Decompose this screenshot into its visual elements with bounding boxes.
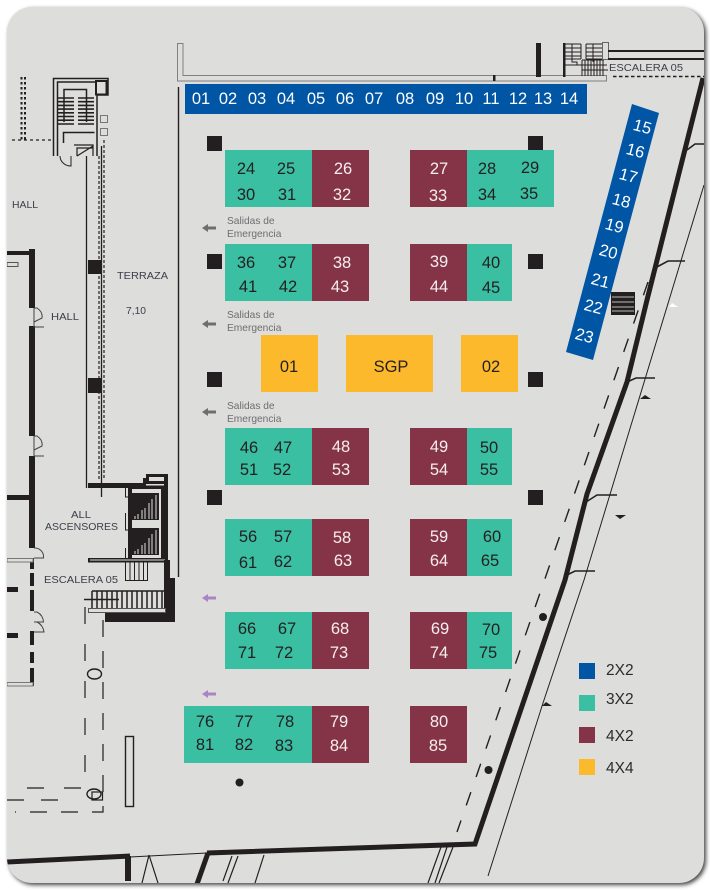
booths row 2 right: 44 (430, 278, 448, 296)
booths row 3 right: 50 (480, 439, 498, 457)
top left stair core (12, 77, 108, 166)
label: hall upper: HALL (12, 200, 38, 211)
diagonal blue booths 15-23: 23 (573, 325, 595, 347)
booths row 6 left: 78 (276, 713, 294, 731)
booths row 3 left: 48 (332, 438, 350, 456)
legend: 3X2 (606, 691, 634, 708)
booths row 4 right: 64 (430, 552, 448, 570)
booths row 1 left: 25 (277, 160, 295, 178)
top blue booths 01-14: 04 (277, 90, 295, 108)
emergency exit 1: Salidas de (227, 216, 275, 227)
booths row 2 left: 42 (279, 278, 297, 296)
booths row 4 right (410, 519, 512, 576)
booths row 5 right: 69 (431, 620, 449, 638)
columns (207, 136, 543, 505)
booths row 4 left: 61 (239, 554, 257, 572)
dots (236, 613, 547, 786)
label: escalera lower: ESCALERA 05 (44, 575, 118, 586)
label: terraza height: 7,10 (126, 306, 146, 317)
emergency exit 1 (202, 216, 282, 240)
purple arrow lower (202, 690, 216, 698)
booths row 2 left: 36 (237, 254, 255, 272)
booths row 1 left: 24 (237, 160, 255, 178)
top blue booths 01-14: 01 (192, 90, 210, 108)
legend (579, 662, 634, 777)
booths row 4 left: 58 (333, 529, 351, 547)
booths row 5 left: 71 (238, 644, 256, 662)
lower stairs (84, 560, 175, 622)
booths row 3 left: 53 (332, 461, 350, 479)
main outer wall (207, 78, 703, 853)
booths row 3 left (225, 428, 369, 485)
diagonal blue booths 15-23: 16 (624, 140, 646, 162)
booths row 2 left (225, 244, 369, 301)
top blue booths 01-14: 11 (482, 90, 500, 108)
booths row 1 left: 30 (237, 186, 255, 204)
top blue booths 01-14: 12 (509, 90, 527, 108)
top blue booths 01-14: 06 (336, 90, 354, 108)
booths row 5 left (225, 612, 369, 669)
yellow booths (261, 335, 518, 392)
legend: 4X4 (606, 760, 634, 777)
legend: 2X2 (606, 662, 634, 679)
booths row 3 left: 46 (240, 439, 258, 457)
top blue booths 01-14: 08 (396, 90, 414, 108)
top blue booths 01-14 (185, 84, 587, 114)
top wall (178, 43, 606, 81)
booths row 2 right: 40 (482, 254, 500, 272)
booths row 5 right: 75 (479, 644, 497, 662)
left wall (7, 249, 44, 686)
booths row 6 left: 77 (235, 713, 253, 731)
emergency exit 1: Emergencia (227, 229, 282, 240)
booths row 5 left: 72 (275, 644, 293, 662)
yellow booths: SGP (374, 358, 408, 376)
booths row 3 right: 55 (480, 461, 498, 479)
booths row 5 right (410, 612, 512, 669)
booths row 4 left: 56 (239, 528, 257, 546)
top blue booths 01-14: 13 (534, 90, 552, 108)
booths row 1 right: 34 (478, 186, 496, 204)
diagonal blue booths 15-23: 18 (610, 190, 632, 212)
top blue booths 01-14: 14 (560, 90, 578, 108)
diagonal blue booths 15-23: 17 (617, 165, 639, 187)
label: hall lower: HALL (51, 312, 79, 323)
yellow booths: 01 (280, 358, 298, 376)
top right stairs (565, 42, 704, 76)
booths row 5 right: 70 (482, 621, 500, 639)
booths row 2 right: 45 (482, 279, 500, 297)
legend: 4X2 (606, 728, 634, 745)
booths row 6 left: 81 (196, 736, 214, 754)
booths row 4 left: 62 (274, 553, 292, 571)
emergency exit 2: Emergencia (227, 323, 282, 334)
booths row 3 left: 47 (274, 439, 292, 457)
diagonal blue booths 15-23: 21 (589, 270, 611, 292)
booths row 2 left: 38 (333, 254, 351, 272)
diagonal blue booths 15-23: 22 (582, 296, 604, 318)
top blue booths 01-14: 10 (455, 90, 473, 108)
booths row 6 left: 84 (330, 737, 348, 755)
booths row 1 right: 33 (429, 187, 447, 205)
top blue booths 01-14: 09 (426, 90, 444, 108)
booths row 2 right (410, 244, 512, 301)
booths row 3 left: 51 (240, 461, 258, 479)
elevators block (88, 474, 168, 580)
booths row 3 right (410, 428, 512, 485)
booths row 2 left: 41 (239, 278, 257, 296)
diagonal blue booths 15-23 (566, 104, 659, 360)
booths row 6 left (184, 706, 369, 763)
booths row 6 left: 76 (196, 713, 214, 731)
right vent (611, 292, 635, 315)
label: terraza: TERRAZA (117, 271, 168, 282)
booths row 3 right: 54 (430, 461, 448, 479)
small triangles (542, 303, 678, 706)
booths row 1 right: 35 (520, 185, 538, 203)
top blue booths 01-14: 07 (365, 90, 383, 108)
emergency exit 3: Salidas de (227, 401, 275, 412)
top blue booths 01-14: 05 (307, 90, 325, 108)
booths row 5 left: 66 (238, 620, 256, 638)
terrace lines (86, 87, 178, 577)
booths row 6 right (410, 706, 467, 763)
wall stubs (567, 144, 704, 575)
booths row 1 left: 26 (334, 160, 352, 178)
booths row 1 right (410, 150, 554, 207)
emergency exit 3 (202, 401, 282, 425)
booths row 2 left: 43 (331, 278, 349, 296)
booths row 4 right: 60 (483, 528, 501, 546)
emergency exit 2 (202, 310, 282, 334)
booths row 6 right: 80 (430, 713, 448, 731)
booths row 3 right: 49 (430, 438, 448, 456)
booths row 5 right: 74 (430, 644, 448, 662)
label: escalera top: ESCALERA 05 (609, 63, 683, 74)
booths row 5 left: 73 (330, 644, 348, 662)
booths row 5 left: 67 (278, 620, 296, 638)
booths row 4 right: 65 (481, 552, 499, 570)
booths row 2 right: 39 (430, 253, 448, 271)
booths row 4 left (225, 519, 369, 576)
diagonal blue booths 15-23: 19 (603, 215, 625, 237)
booths row 6 left: 83 (275, 737, 293, 755)
booths row 6 right: 85 (429, 737, 447, 755)
diagonal blue booths 15-23: 20 (597, 241, 619, 263)
booths row 2 left: 37 (278, 254, 296, 272)
emergency exit 2: Salidas de (227, 310, 275, 321)
booths row 4 left: 63 (334, 552, 352, 570)
booths row 3 left: 52 (273, 461, 291, 479)
booths row 1 left: 31 (278, 186, 296, 204)
booths row 4 right: 59 (430, 528, 448, 546)
booths row 1 left (225, 150, 369, 207)
bottom wall (7, 847, 453, 884)
yellow booths: 02 (482, 358, 500, 376)
booths row 6 left: 79 (330, 713, 348, 731)
booths row 1 left: 32 (333, 186, 351, 204)
purple arrow upper (202, 594, 216, 602)
lower dashed corridor (7, 607, 134, 812)
top blue booths 01-14: 02 (219, 90, 237, 108)
top blue booths 01-14: 03 (248, 90, 266, 108)
booths row 1 right: 28 (478, 160, 496, 178)
thin outer line (488, 185, 704, 876)
dashed inner line (457, 282, 648, 832)
booths row 5 left: 68 (331, 620, 349, 638)
booths row 1 right: 27 (430, 160, 448, 178)
emergency exit 3: Emergencia (227, 414, 282, 425)
booths row 1 right: 29 (521, 159, 539, 177)
booths row 4 left: 57 (274, 528, 292, 546)
label: all: ALL (71, 510, 91, 521)
label: ascensores: ASCENSORES (45, 522, 118, 533)
booths row 6 left: 82 (235, 736, 253, 754)
diagonal blue booths 15-23: 15 (631, 116, 653, 138)
